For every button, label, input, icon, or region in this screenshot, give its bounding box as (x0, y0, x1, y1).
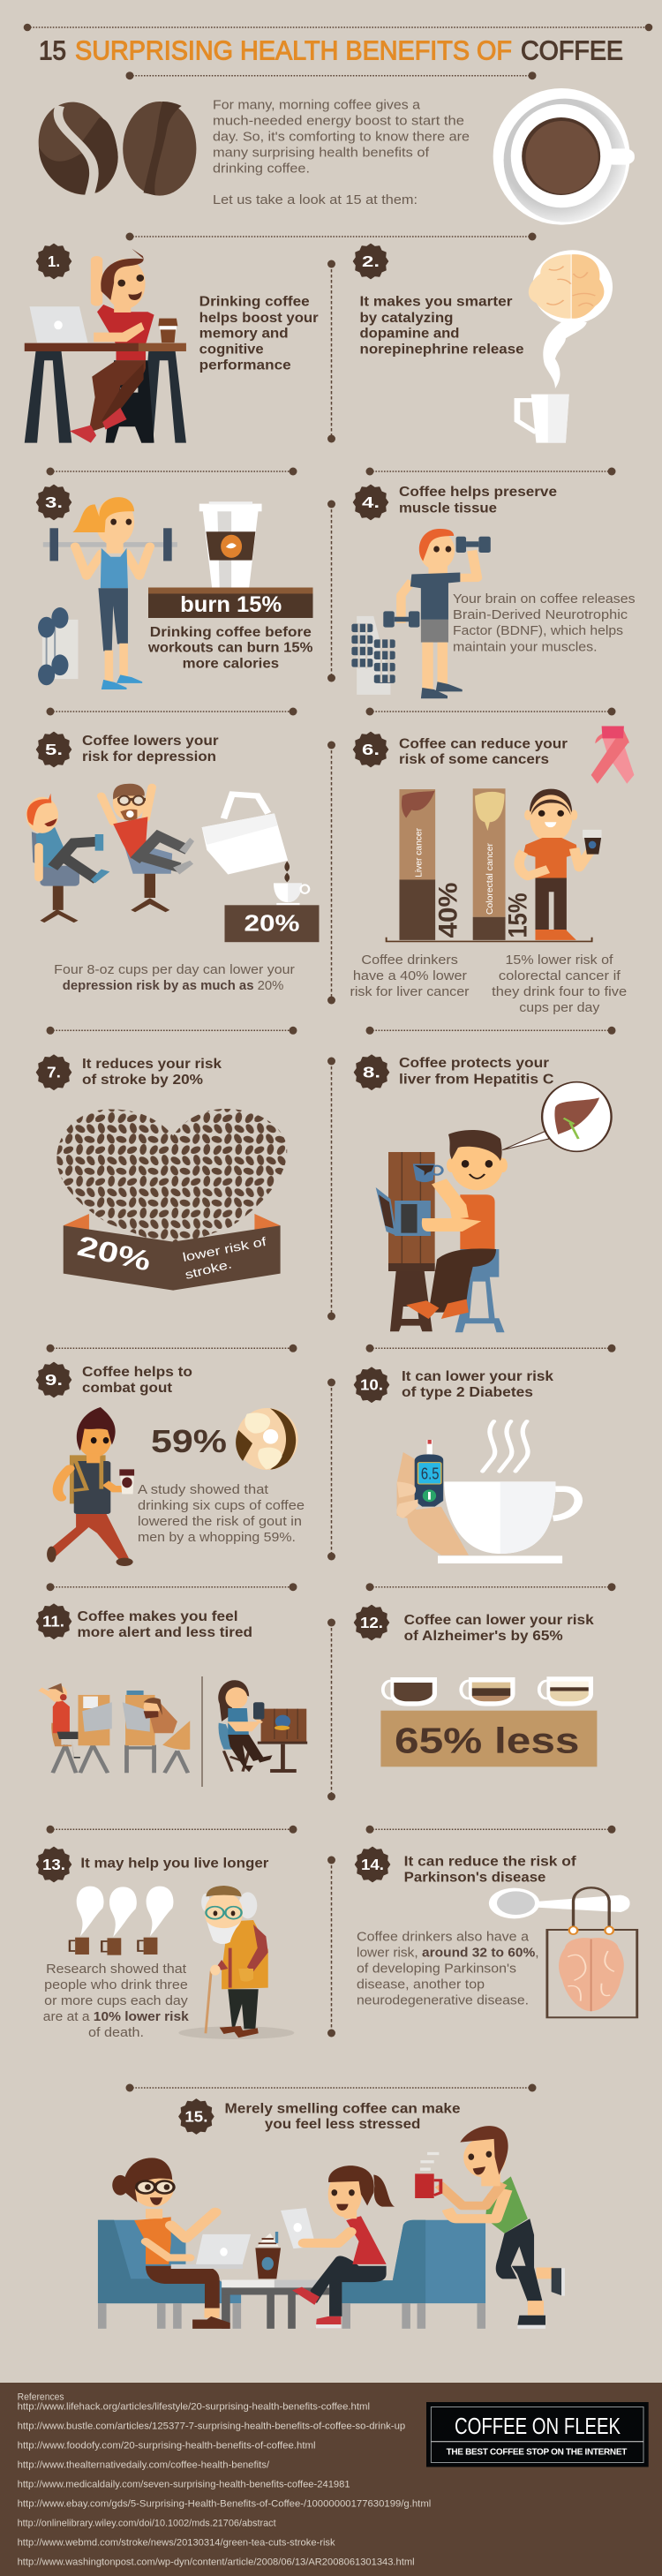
heading 15: Merely smelling coffee can make (224, 2101, 461, 2116)
badge 1 (37, 244, 71, 279)
badge 6: 6. (362, 741, 380, 758)
references list: http://www.foodofy.com/20-surprising-health-benefits-of-coffee.html (18, 2440, 316, 2451)
bar chart: liver and colorectal cancer: 40% (434, 883, 463, 938)
panel: benefit 13 longer life (37, 1847, 294, 2040)
text: gout study: men by a whopping 59%. (138, 1530, 296, 1545)
panel: benefit 7 stroke (37, 1055, 287, 1291)
text: boost memory: memory and (199, 327, 289, 342)
text: parkinsons risk: lower risk, around 32 to 60% , (357, 1945, 539, 1960)
text: calories (147, 625, 313, 671)
heading 13: It may help you live longer (80, 1857, 268, 1872)
panel: benefit 1 memory (25, 244, 319, 443)
text: boost memory (199, 295, 319, 373)
text: colorectal caption: they drink four to five (492, 984, 627, 999)
text: lower risk of death (43, 1962, 189, 2040)
badge 3: 3. (45, 493, 63, 511)
intro text: For many, morning coffee gives a (213, 97, 421, 113)
text: smarter: by catalyzing (360, 311, 454, 326)
heading 5: risk for depression (82, 749, 216, 765)
heading 10: of type 2 Diabetes (402, 1385, 533, 1400)
heading 7: of stroke by 20% (82, 1073, 203, 1088)
callout: burn 15%: burn 15% (180, 592, 282, 617)
heading 6 (399, 736, 568, 767)
title: 15 (39, 35, 66, 66)
text: smarter: dopamine and (360, 327, 459, 342)
text: colorectal caption (492, 953, 627, 1015)
panel: benefit 3 workouts (37, 486, 313, 689)
heading 10 (402, 1369, 553, 1400)
intro text: Let us take a look at 15 at them: (213, 192, 418, 207)
takeaway coffee (255, 2232, 281, 2278)
panel: benefit 11 alert (37, 1604, 307, 1787)
badge 11 (37, 1604, 71, 1638)
illustration: two men relaxing in chairs (26, 784, 194, 923)
callout: 20%: 20% (244, 910, 300, 937)
badge 14: 14. (361, 1856, 384, 1873)
divider between scenes (201, 1676, 203, 1787)
footer: references (0, 2383, 662, 2576)
heading dividers and vertical dividers (27, 27, 649, 2088)
references list: http://www.ebay.com/gds/5-Surprising-Health-Benefits-of-Coffee-/10000000177630199/g.html (18, 2498, 431, 2509)
text: lower risk of death: of death. (88, 2025, 144, 2040)
text: gout study: lowered the risk of gout in (138, 1514, 302, 1529)
text: liver caption: Coffee drinkers (361, 953, 458, 968)
panel: benefit 4 muscle (351, 485, 636, 698)
text: lower risk of death: Research showed that (46, 1962, 187, 1977)
heading 12: of Alzheimer's by 65% (404, 1629, 563, 1644)
badge 8 (355, 1055, 388, 1089)
text: boost memory: performance (199, 358, 291, 373)
text: parkinsons risk: Coffee drinkers also have a (357, 1929, 530, 1944)
illustration: old man with cane (178, 1886, 294, 2039)
illustration: takeaway cup (199, 501, 262, 588)
text: smarter (360, 295, 524, 358)
right sofa (342, 2220, 485, 2329)
text: smarter: norepinephrine release (360, 343, 524, 358)
badge 4: 4. (362, 493, 380, 511)
banner text: 20% lower risk of stroke (74, 1230, 267, 1282)
badge 10: 10. (360, 1376, 383, 1394)
panel: intro (39, 88, 635, 225)
intro text: many surprising health benefits of (213, 145, 430, 161)
text: gout study: drinking six cups of coffee (138, 1498, 305, 1513)
text: smarter: It makes you smarter (360, 295, 512, 310)
heading 4: Coffee helps preserve (399, 485, 557, 500)
illustration: friends on sofas with coffee (98, 2126, 565, 2329)
text: lower risk of death: people who drink three (44, 1977, 188, 1992)
icon: knee joint (236, 1408, 298, 1470)
text: calories: Drinking coffee before (150, 625, 312, 640)
text: colorectal caption: cups per day (519, 1000, 600, 1015)
heading 14: It can reduce the risk of (404, 1854, 577, 1869)
text: colorectal caption: colorectal cancer if (499, 968, 621, 983)
illustration: spoon and brain tote bag (489, 1887, 637, 2017)
badge 15 (179, 2099, 214, 2134)
badge 3 (37, 486, 71, 519)
references list: References (18, 2392, 64, 2403)
references list: http://www.medicaldaily.com/seven-surprising-health-benefits-coffee-241981 (18, 2479, 350, 2489)
badge 6 (353, 733, 388, 766)
panel: benefit 15 less stressed (98, 2099, 565, 2329)
illustration: man with dumbbells (351, 529, 491, 698)
heading 4 (399, 485, 557, 516)
illustration: hand with glucose meter and coffee cup: 6.5 (421, 1464, 439, 1482)
illustration: man drinking coffee at laptop (376, 1130, 508, 1332)
badge 5 (37, 733, 71, 766)
references list: http://www.washingtonpost.com/wp-dyn/content/article/2008/06/13/AR2008061301343.html (18, 2557, 415, 2567)
badge 13: 13. (42, 1856, 65, 1873)
heading 15 (224, 2101, 461, 2132)
woman with tablet (281, 2165, 395, 2329)
heading 8: liver from Hepatitis C (399, 1073, 554, 1088)
text: parkinsons risk (357, 1929, 539, 2007)
heading 12: Coffee can lower your risk (404, 1613, 594, 1628)
badge 8: 8. (363, 1064, 380, 1081)
text: BDNF: Factor (BDNF), which helps (453, 623, 623, 638)
woman with glasses (112, 2158, 230, 2329)
badge 7: 7. (47, 1064, 61, 1081)
icon: coffee cup on saucer (493, 88, 635, 225)
icon: coffee beans (39, 102, 196, 196)
illustration: alert woman with coffee (218, 1680, 307, 1773)
intro text (213, 97, 470, 207)
panel: benefit 5 depression (26, 733, 319, 993)
heading 9 (82, 1365, 192, 1396)
title: COFFEE (521, 35, 623, 66)
illustration: hand with glucose meter and coffee cup (396, 1421, 578, 1563)
banner text: 20% lower risk of stroke: 20% (74, 1230, 154, 1277)
heading 7 (82, 1057, 222, 1088)
text: boost memory: cognitive (199, 343, 264, 358)
heading 8: Coffee protects your (399, 1056, 549, 1071)
panel: benefit 14 parkinsons (355, 1847, 637, 2017)
badge 7 (37, 1055, 71, 1089)
text: calories: more calories (183, 657, 279, 671)
badge 1: 1. (48, 252, 60, 270)
callout: burn 15% (148, 588, 312, 618)
badge 14 (355, 1847, 390, 1882)
panel: benefit 8 liver (355, 1055, 612, 1332)
logo: Coffee on Fleek: THE BEST COFFEE STOP ON THE INTERNET (447, 2447, 627, 2458)
heading 6: risk of some cancers (399, 752, 549, 767)
badge 9: 9. (45, 1371, 63, 1389)
illustration: pitcher pouring into cup (202, 795, 309, 905)
references list: http://onlinelibrary.wiley.com/doi/10.1002/mds.21706/abstract (18, 2519, 276, 2529)
callout: 65% less (380, 1711, 597, 1766)
panel: benefit 6 cancers (350, 726, 634, 1015)
illustration: three steaming mugs (70, 1887, 173, 1955)
man standing with mug (439, 2126, 565, 2329)
bar chart: liver and colorectal cancer: Colorectal cancer (485, 842, 495, 915)
text: BDNF: Your brain on coffee releases (453, 591, 636, 606)
left sofa (98, 2220, 241, 2329)
banner text: 20% lower risk of stroke: lower risk of (182, 1234, 267, 1264)
panel: benefit 10 diabetes (355, 1367, 578, 1563)
logo: Coffee on Fleek: COFFEE ON FLEEK (455, 2413, 621, 2439)
badge 2: 2. (362, 252, 380, 270)
callout: 65% less: 65% less (395, 1721, 579, 1761)
text: liver caption: risk for liver cancer (350, 984, 470, 999)
text: colorectal caption: 15% lower risk of (505, 953, 613, 968)
badge 15: 15. (184, 2108, 207, 2126)
heading 8 (399, 1056, 554, 1088)
references list: http://www.bustle.com/articles/125377-7-surprising-health-benefits-of-coffee-so-drink-up (18, 2422, 405, 2432)
red mug with steam (415, 2154, 440, 2198)
text: gout study (138, 1482, 305, 1545)
references list: http://www.thealternativedaily.com/coffee-health-benefits/ (18, 2460, 270, 2471)
illustration: woman with coffee (519, 789, 602, 940)
heading 4: muscle tissue (399, 501, 497, 516)
badge 9 (37, 1363, 71, 1397)
heading 15: you feel less stressed (265, 2117, 420, 2132)
intro text: drinking coffee. (213, 161, 310, 177)
badge 12 (355, 1605, 388, 1640)
badge 5: 5. (45, 741, 63, 758)
badge 12: 12. (360, 1614, 383, 1631)
text: liver caption: have a 40% lower (353, 968, 467, 983)
heading 14: Parkinson's disease (404, 1870, 546, 1885)
text: boost memory: Drinking coffee (199, 295, 310, 310)
callout: 20% (224, 905, 320, 942)
illustration: woman lifting barbell (38, 497, 177, 689)
badge 10 (355, 1367, 388, 1402)
heading 7: It reduces your risk (82, 1057, 222, 1072)
panel: benefit 2 smarter (353, 244, 613, 443)
intro text: day. So, it's comforting to know there are (213, 129, 470, 145)
heading 5: Coffee lowers your (82, 734, 219, 749)
text: boost memory: helps boost your (199, 311, 319, 326)
icon: speech bubble with liver (502, 1082, 612, 1151)
text: parkinsons risk: disease, another top (357, 1977, 485, 1992)
badge 13 (37, 1847, 71, 1882)
text: lower risk of death: or more cups each day (44, 1993, 188, 2008)
heading 11: Coffee makes you feel (78, 1609, 238, 1624)
illustration: walking man with backpack and coffee (47, 1407, 134, 1566)
text: liver caption (350, 953, 470, 999)
references list: http://www.lifehack.org/articles/lifestyle/20-surprising-health-benefits-coffee.html (18, 2402, 370, 2413)
text: parkinsons risk: neurodegenerative disease. (357, 1992, 529, 2007)
heading 12 (404, 1613, 594, 1644)
heading 6: Coffee can reduce your (399, 736, 568, 751)
badge 2 (353, 244, 388, 279)
stat: 59%: 59% (151, 1423, 227, 1459)
text: calories: workouts can burn 15% (147, 641, 313, 656)
text: BDNF: maintain your muscles. (453, 639, 598, 655)
illustration: brain in steam above mug (517, 250, 613, 443)
badge 4 (353, 486, 388, 519)
heading 10: It can lower your risk (402, 1369, 553, 1384)
illustration: man at laptop (25, 249, 186, 443)
text: BDNF (453, 591, 636, 655)
text: parkinsons risk: of developing Parkinson's (357, 1961, 516, 1976)
text: depression risk (54, 962, 295, 993)
text: lower risk of death: are at a 10% lower risk (43, 2009, 189, 2024)
laptop (171, 2234, 251, 2269)
text: gout study: A study showed that (138, 1482, 269, 1497)
heading 11: more alert and less tired (78, 1625, 252, 1640)
text: BDNF: Brain-Derived Neurotrophic (453, 607, 628, 622)
text: depression risk: Four 8-oz cups per day can lower your (54, 962, 295, 977)
heading 5 (82, 734, 219, 765)
illustration: tired coworkers at desks (40, 1683, 190, 1773)
icon: awareness ribbon (591, 726, 634, 784)
bar chart: liver and colorectal cancer: Liver cancer (415, 827, 424, 877)
badge 11: 11. (42, 1613, 64, 1631)
illustration: heart of coffee beans (56, 1109, 287, 1291)
logo: Coffee on Fleek (426, 2402, 649, 2467)
references list: http://www.webmd.com/stroke/news/20130314/green-tea-cuts-stroke-risk (18, 2537, 335, 2548)
heading 14 (404, 1854, 577, 1885)
bar chart: liver and colorectal cancer (387, 788, 592, 941)
coffee table (222, 2280, 329, 2329)
references list (18, 2392, 431, 2567)
illustration: three cups (383, 1676, 593, 1706)
heading 9: Coffee helps to (82, 1365, 192, 1380)
panel: benefit 9 gout (37, 1363, 305, 1566)
panel: benefit 12 alzheimers (355, 1605, 597, 1766)
intro text: much-needed energy boost to start the (213, 113, 464, 129)
bar chart: liver and colorectal cancer: 15% (503, 893, 532, 938)
banner text: 20% lower risk of stroke: stroke. (184, 1256, 233, 1282)
heading 11 (78, 1609, 252, 1640)
text: depression risk: depression risk by as much as 20% (63, 978, 283, 993)
heading 9: combat gout (82, 1381, 172, 1396)
title: SURPRISING HEALTH BENEFITS OF (75, 35, 512, 66)
